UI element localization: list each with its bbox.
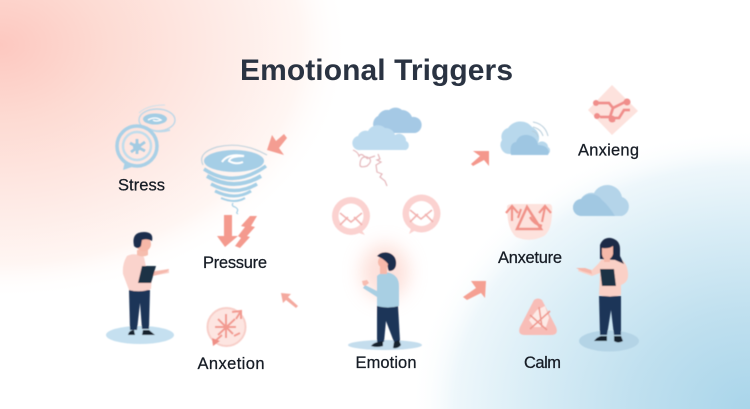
icon: stress speech spiral [117, 105, 175, 170]
label: Anxeture: Anxeture [498, 249, 562, 267]
figure: woman with tablet [576, 238, 639, 352]
figure: glow behind person [361, 244, 409, 300]
figure: central person [348, 252, 422, 350]
figure: man with tablet [106, 232, 174, 344]
arrow: into tornado [267, 134, 287, 155]
title: Emotional Triggers [240, 54, 513, 87]
icon: plain cloud [573, 185, 629, 216]
arrow: toward anxeture [463, 281, 486, 300]
icon: tornado [202, 145, 267, 214]
icon: calm triangle [519, 298, 557, 335]
label: Anxieng: Anxieng [578, 142, 639, 160]
arrow: up to cloud [471, 151, 489, 166]
label: Pressure: Pressure [203, 254, 267, 272]
label: Anxetion: Anxetion [198, 355, 264, 373]
icon: anxeture triangle arrows [506, 204, 552, 240]
label: Emotion: Emotion [356, 354, 416, 372]
icon: cloud with signal [500, 121, 550, 155]
icon: envelope bubble left [332, 197, 370, 235]
label: Stress: Stress [118, 176, 165, 194]
icon: anxetion compass [208, 308, 246, 346]
icon: anxieng diamond [588, 85, 638, 135]
arrow: toward anxetion [281, 293, 298, 308]
icon: pressure arrow and bolt [217, 215, 257, 248]
label: Calm: Calm [524, 354, 561, 372]
icon: envelope bubble right [402, 194, 440, 234]
icon: storm clouds with squiggle [352, 108, 422, 186]
